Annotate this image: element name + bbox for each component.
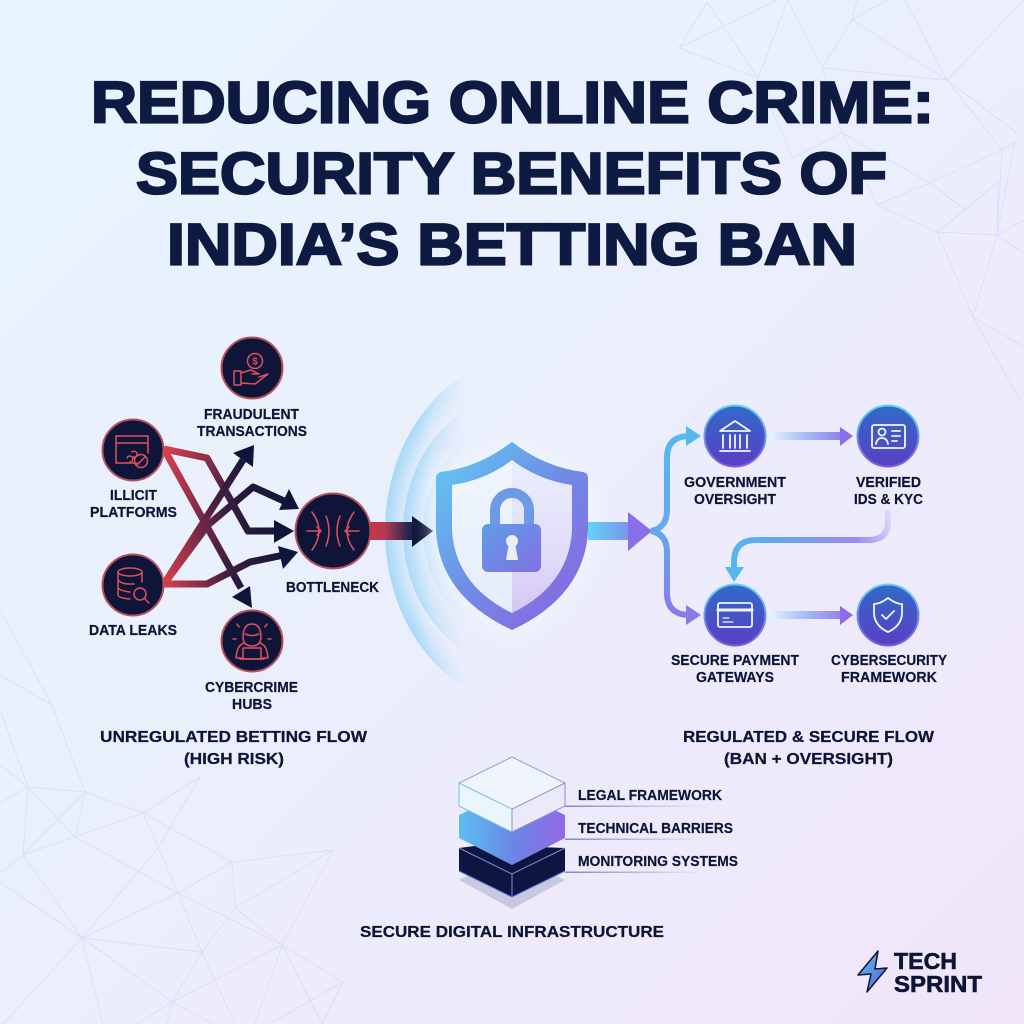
stack caption: SECURE DIGITAL INFRASTRUCTURE — [360, 924, 664, 941]
title: INDIA’S BETTING BAN — [167, 212, 857, 278]
node: data leaks — [89, 554, 177, 639]
stack labels: MONITORING SYSTEMS — [578, 854, 738, 870]
stack labels: TECHNICAL BARRIERS — [578, 821, 733, 837]
logo: tech sprint: TECH — [894, 948, 957, 974]
node: secure payment gateways — [671, 584, 799, 686]
node: bottleneck: BOTTLENECK — [286, 580, 379, 596]
node: fraudulent transactions: FRAUDULENT — [204, 407, 299, 423]
shield with lock — [437, 443, 587, 629]
node: cybercrime hubs: CYBERCRIME — [205, 680, 298, 696]
stack labels: LEGAL FRAMEWORK — [578, 788, 722, 804]
node: cybersecurity framework: FRAMEWORK — [841, 670, 938, 686]
node: illicit platforms — [90, 420, 177, 521]
node: secure payment gateways: GATEWAYS — [696, 670, 774, 686]
concentric shield waves — [385, 378, 460, 684]
logo: tech sprint — [858, 948, 982, 997]
heading: regulated flow — [683, 729, 935, 768]
node: fraudulent transactions: $ — [252, 356, 258, 368]
fork arrows: to oversight and payment — [651, 426, 701, 625]
stack labels — [565, 788, 738, 873]
node: illicit platforms: PLATFORMS — [90, 505, 177, 521]
arrow: shield to fork — [588, 512, 652, 551]
layer: monitoring systems — [459, 845, 565, 897]
node: data leaks: DATA LEAKS — [89, 623, 177, 639]
node: cybersecurity framework — [831, 584, 947, 686]
node: cybercrime hubs: HUBS — [232, 697, 272, 713]
arrow: payment to cybersecurity — [770, 606, 853, 625]
node: bottleneck — [286, 494, 379, 596]
node: illicit platforms: ILLICIT — [110, 488, 157, 504]
arrows: unregulated crossing flows — [164, 445, 299, 608]
title — [91, 70, 934, 278]
node: fraudulent transactions: TRANSACTIONS — [197, 424, 307, 440]
logo: tech sprint: SPRINT — [894, 971, 982, 997]
heading: unregulated flow: UNREGULATED BETTING FLOW — [100, 729, 368, 746]
heading: unregulated flow: (HIGH RISK) — [184, 751, 284, 768]
node: cybercrime hubs — [205, 610, 298, 713]
node: government oversight: GOVERNMENT — [684, 475, 786, 491]
arrow: bottleneck to shield — [370, 516, 433, 547]
heading: regulated flow: REGULATED & SECURE FLOW — [683, 729, 935, 746]
layered stack: infrastructure — [459, 757, 565, 909]
node: cybersecurity framework: CYBERSECURITY — [831, 653, 947, 669]
heading: regulated flow: (BAN + OVERSIGHT) — [724, 751, 893, 768]
title: SECURITY BENEFITS OF — [136, 142, 887, 206]
layer: legal framework — [459, 757, 565, 832]
node: verified ids and kyc — [854, 406, 923, 508]
node: verified ids and kyc: IDS & KYC — [854, 492, 923, 508]
node: secure payment gateways: SECURE PAYMENT — [671, 653, 799, 669]
layer: technical barriers — [459, 790, 565, 865]
node: fraudulent transactions — [197, 338, 307, 440]
node: verified ids and kyc: VERIFIED — [856, 475, 921, 491]
heading: unregulated flow — [100, 729, 368, 768]
arrow: verified to payment — [725, 510, 888, 582]
node: government oversight — [684, 406, 786, 508]
lock icon — [482, 493, 541, 572]
title: REDUCING ONLINE CRIME: — [91, 70, 934, 136]
node: government oversight: OVERSIGHT — [694, 492, 776, 508]
arrow: oversight to verified — [770, 427, 853, 446]
